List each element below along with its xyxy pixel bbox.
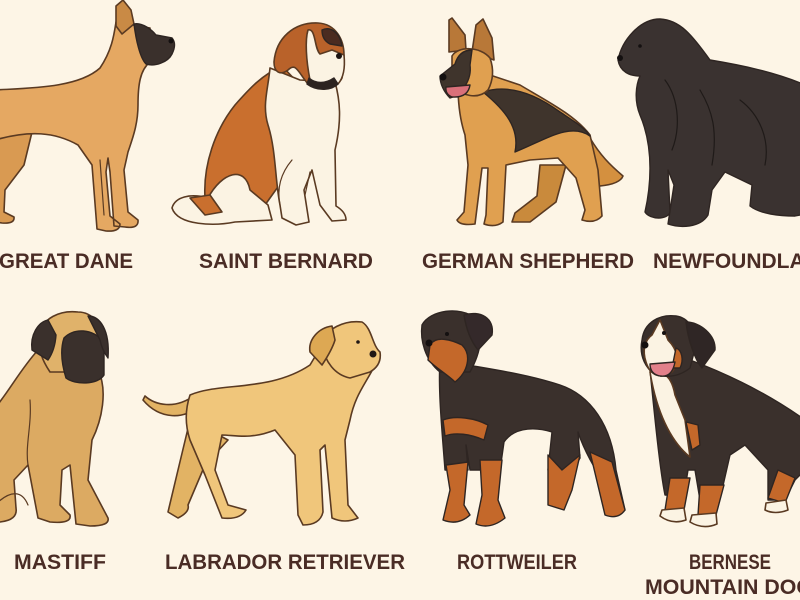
label: great dane: GREAT DANE bbox=[0, 250, 133, 273]
dog: german shepherd bbox=[440, 18, 623, 226]
dog: great dane bbox=[0, 0, 174, 231]
dog: bernese mountain dog bbox=[641, 316, 800, 527]
label: saint bernard: SAINT BERNARD bbox=[199, 250, 373, 273]
dog: mastiff bbox=[0, 312, 108, 526]
dog: rottweiler bbox=[422, 311, 625, 526]
label: mastiff: MASTIFF bbox=[14, 551, 106, 574]
dog: saint bernard bbox=[172, 23, 346, 225]
label: labrador retriever: LABRADOR RETRIEVER bbox=[165, 551, 405, 574]
label: bernese mountain dog bbox=[645, 551, 800, 599]
label: german shepherd: GERMAN SHEPHERD bbox=[422, 250, 634, 273]
dog: newfoundland bbox=[617, 19, 800, 226]
label: rottweiler: ROTTWEILER bbox=[457, 551, 577, 574]
label: bernese mountain dog: BERNESE bbox=[689, 551, 771, 574]
dog: labrador retriever bbox=[143, 322, 380, 525]
